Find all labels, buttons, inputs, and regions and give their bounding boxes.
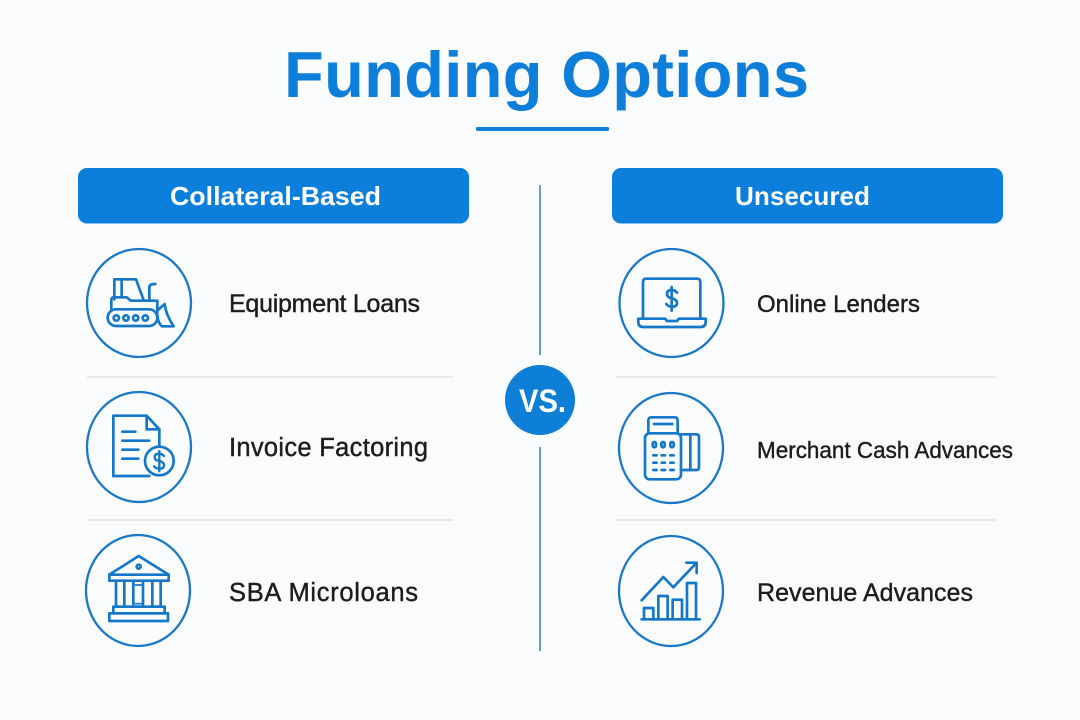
row: online lenders bbox=[620, 249, 920, 357]
row: merchant cash advances bbox=[619, 393, 1013, 503]
title underline bbox=[476, 127, 609, 131]
label: invoice factoring: Invoice Factoring bbox=[229, 434, 428, 462]
row: sba microloans bbox=[86, 535, 418, 646]
icon: laptop with dollar bbox=[620, 249, 724, 357]
label: merchant cash advances: Merchant Cash Advances bbox=[757, 437, 1013, 463]
icon: growth chart bbox=[619, 536, 723, 646]
icon: bank building bbox=[86, 535, 190, 646]
icon: card terminal bbox=[619, 393, 723, 503]
header: unsecured: Unsecured bbox=[735, 181, 870, 211]
label: online lenders: Online Lenders bbox=[757, 291, 920, 318]
header: collateral-based bbox=[78, 168, 469, 224]
center divider: upper line bbox=[539, 185, 541, 355]
label: revenue advances: Revenue Advances bbox=[757, 579, 973, 607]
header: collateral-based: Collateral-Based bbox=[170, 181, 381, 211]
title: Funding Options bbox=[284, 38, 809, 111]
row: revenue advances bbox=[619, 536, 973, 646]
label: sba microloans: SBA Microloans bbox=[229, 579, 418, 607]
icon: invoice with dollar bbox=[87, 392, 191, 502]
center divider: lower line bbox=[539, 447, 541, 651]
icon: bulldozer bbox=[87, 249, 191, 357]
row: invoice factoring bbox=[87, 392, 428, 502]
row: equipment loans bbox=[87, 249, 420, 357]
panel: collateral-based bbox=[78, 168, 469, 646]
vs badge bbox=[505, 365, 575, 435]
vs badge: VS. bbox=[519, 383, 566, 419]
header: unsecured bbox=[612, 168, 1003, 224]
panel: unsecured bbox=[612, 168, 1013, 646]
label: equipment loans: Equipment Loans bbox=[229, 290, 420, 318]
